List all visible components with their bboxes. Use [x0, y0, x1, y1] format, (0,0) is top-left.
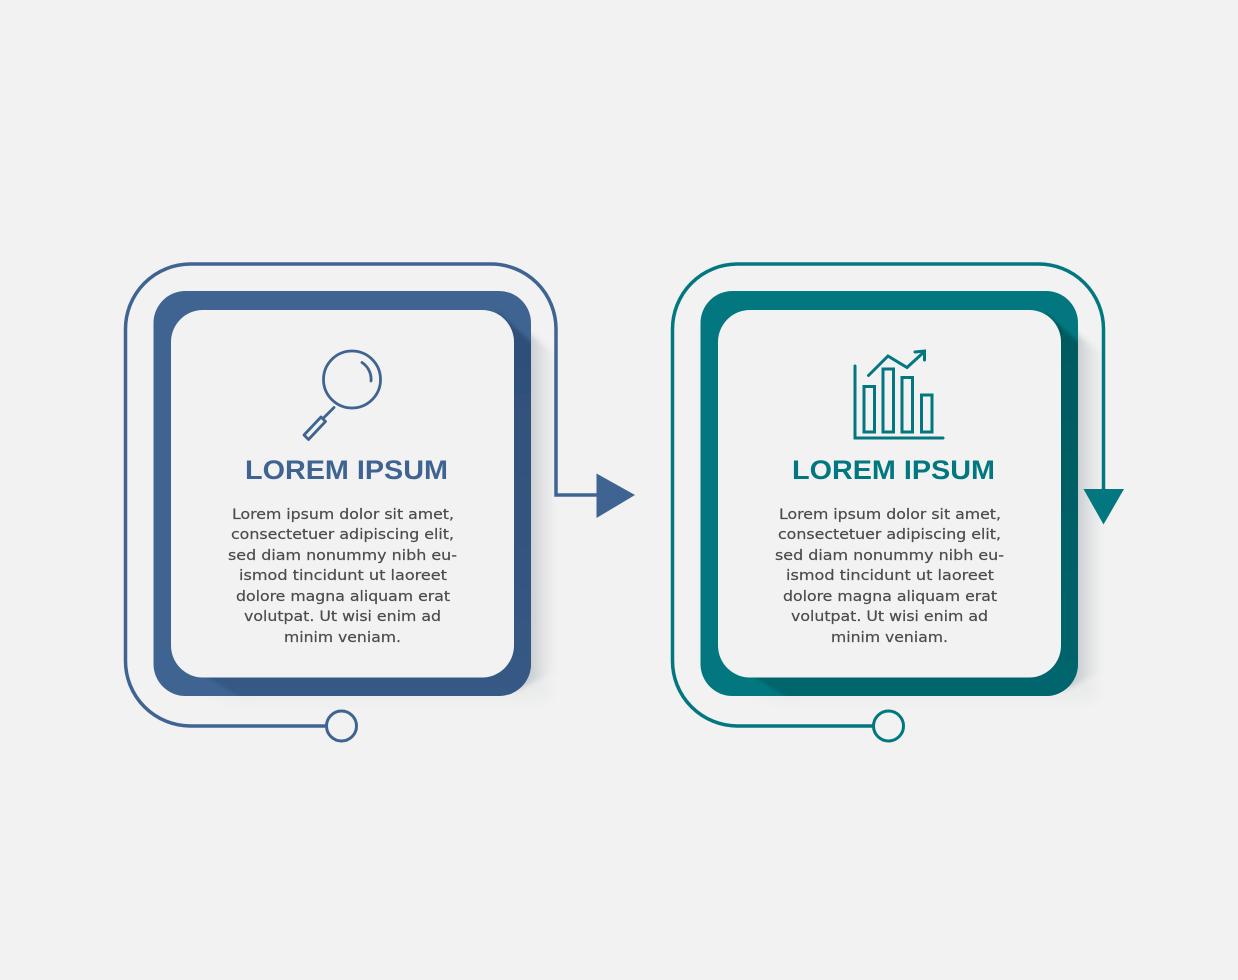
body text: Lorem ipsum dolor sit amet, [779, 507, 1001, 523]
body text: consectetuer adipiscing elit, [231, 527, 454, 543]
body text [228, 507, 457, 646]
body text: ismod tincidunt ut laoreet [786, 568, 995, 584]
body text: volutpat. Ut wisi enim ad [791, 609, 988, 625]
panel: step 1 blue [126, 264, 635, 741]
body text: minim veniam. [831, 630, 948, 646]
icon: bar chart [855, 351, 943, 438]
card shadow [205, 322, 556, 708]
card shadow [752, 322, 1103, 708]
inner card [171, 310, 514, 678]
end circle [326, 711, 356, 741]
arrow head [596, 474, 635, 518]
frame inner shading [196, 312, 540, 700]
card frame [154, 291, 531, 696]
body text: minim veniam. [284, 630, 401, 646]
arrow head [1084, 489, 1124, 524]
inner card [718, 310, 1061, 678]
body text [775, 507, 1004, 646]
body text: consectetuer adipiscing elit, [778, 527, 1001, 543]
heading: LOREM IPSUM [792, 455, 995, 485]
end circle [874, 711, 904, 741]
frame inner shading [743, 312, 1087, 700]
heading: LOREM IPSUM [245, 455, 448, 485]
icon: magnifier [304, 351, 380, 440]
connector line with arrow shaft [672, 264, 1104, 726]
body text: volutpat. Ut wisi enim ad [244, 609, 441, 625]
panel: step 2 teal [672, 264, 1124, 741]
body text: sed diam nonummy nibh eu- [228, 548, 457, 564]
body text: dolore magna aliquam erat [783, 589, 998, 605]
body text: ismod tincidunt ut laoreet [239, 568, 448, 584]
card frame [700, 291, 1078, 696]
body text: sed diam nonummy nibh eu- [775, 548, 1004, 564]
body text: Lorem ipsum dolor sit amet, [232, 507, 454, 523]
body text: dolore magna aliquam erat [236, 589, 451, 605]
connector line with arrow shaft [126, 264, 600, 726]
